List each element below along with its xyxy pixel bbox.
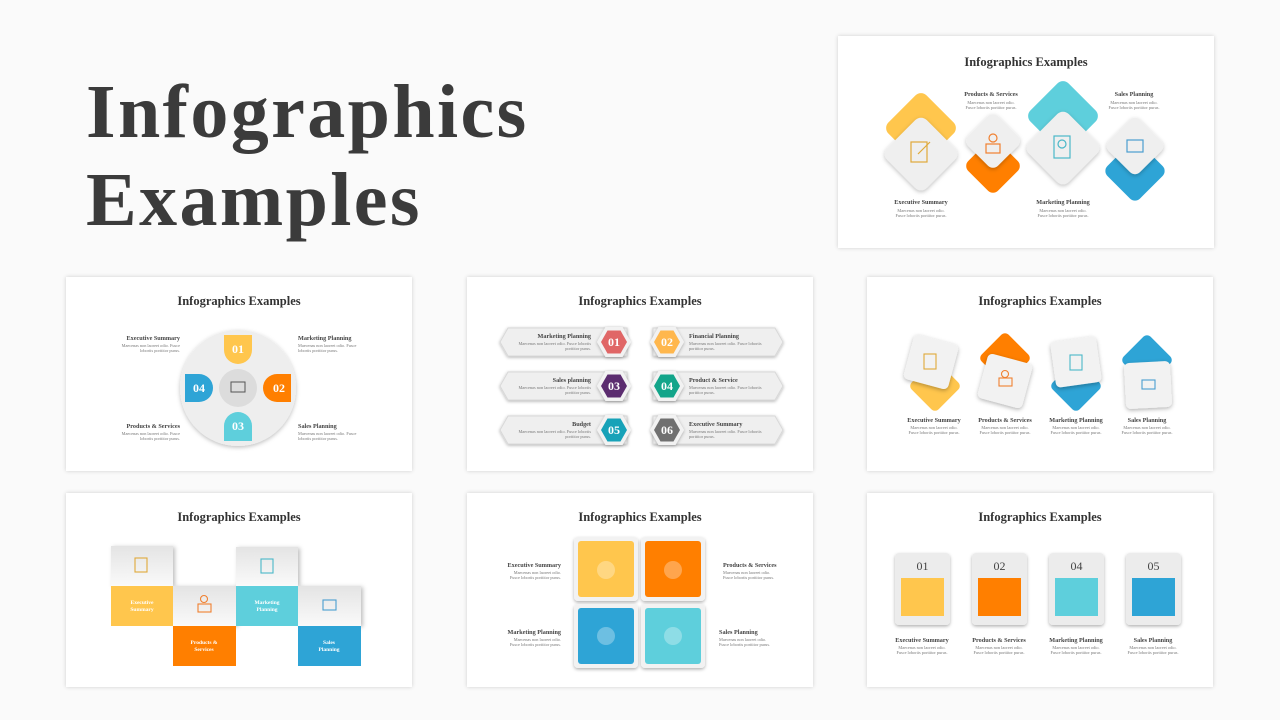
colored diamonds <box>883 78 1168 204</box>
labels: Maecenas non laoreet odio. <box>975 645 1023 650</box>
labels: Marketing Planning <box>538 333 592 340</box>
slide: hexagon list <box>467 277 813 471</box>
labels: Maecenas non laoreet odio. Fusce lobortis <box>689 429 762 434</box>
labels: porttitor purus. <box>565 390 591 395</box>
labels: Executive Summary <box>508 562 562 569</box>
slide: staircase blocks <box>66 493 412 687</box>
labels: Fusce lobortis porttitor purus. <box>908 430 960 435</box>
cards <box>895 553 1181 625</box>
block labels <box>130 600 340 653</box>
labels: Fusce lobortis porttitor purus. <box>979 430 1031 435</box>
labels: Sales Planning <box>298 423 338 430</box>
labels: lobortis porttitor purus. <box>140 348 180 353</box>
labels: lobortis porttitor purus. <box>298 436 338 441</box>
wheel: 02 <box>273 381 285 395</box>
slide: diamond chain <box>838 36 1214 248</box>
labels: Maecenas non laoreet odio. <box>1123 425 1171 430</box>
labels: Maecenas non laoreet odio. Fusce <box>122 431 180 436</box>
icons <box>911 134 1143 162</box>
labels: Marketing Planning <box>508 629 562 636</box>
colored diamonds <box>908 331 1174 413</box>
hexagons <box>597 327 684 445</box>
labels: Maecenas non laoreet odio. Fusce <box>298 431 356 436</box>
labels <box>894 91 1160 218</box>
labels: Maecenas non laoreet odio. Fusce lobortis <box>518 429 591 434</box>
white tilted squares <box>903 334 1172 409</box>
slide: 2x2 squares <box>467 493 813 687</box>
gray diamonds with icons <box>881 108 1166 194</box>
hexagons: 04 <box>661 379 673 393</box>
main title <box>86 70 529 242</box>
labels: Sales Planning <box>1134 637 1173 644</box>
labels: porttitor purus. <box>565 346 591 351</box>
hexagons: 05 <box>608 423 620 437</box>
squares <box>574 537 705 668</box>
labels: Fusce lobortis porttitor purus. <box>723 575 774 580</box>
labels: Fusce lobortis porttitor purus. <box>510 575 561 580</box>
cards: 04 <box>1070 559 1082 573</box>
hexagons: 06 <box>661 423 673 437</box>
heading: Infographics Examples <box>964 55 1088 69</box>
wheel: 04 <box>193 381 205 395</box>
labels <box>122 335 356 441</box>
heading: Infographics Examples <box>978 510 1102 524</box>
labels: Products & Services <box>964 91 1018 98</box>
labels: Maecenas non laoreet odio. Fusce <box>122 343 180 348</box>
hexagons: 02 <box>661 335 673 349</box>
labels: Fusce lobortis porttitor purus. <box>895 213 947 218</box>
labels: Maecenas non laoreet odio. <box>898 645 946 650</box>
heading: Infographics Examples <box>177 510 301 524</box>
heading: Infographics Examples <box>177 294 301 308</box>
labels: Maecenas non laoreet odio. <box>967 100 1015 105</box>
labels: Fusce lobortis porttitor purus. <box>965 105 1017 110</box>
labels: Products & Services <box>972 637 1026 644</box>
labels: Product & Service <box>689 377 738 384</box>
bars <box>500 328 783 444</box>
icons <box>924 354 1155 389</box>
block labels: Sales <box>323 640 335 646</box>
labels: Maecenas non laoreet odio. <box>910 425 958 430</box>
labels: Maecenas non laoreet odio. <box>1110 100 1158 105</box>
labels: Fusce lobortis porttitor purus. <box>719 642 770 647</box>
labels: Marketing Planning <box>1049 417 1104 424</box>
main title: Infographics <box>86 70 529 154</box>
labels: Sales Planning <box>1128 417 1167 424</box>
labels: Maecenas non laoreet odio. <box>897 208 945 213</box>
labels <box>518 333 762 439</box>
labels: Fusce lobortis porttitor purus. <box>1121 430 1173 435</box>
heading: Infographics Examples <box>578 510 702 524</box>
labels: Maecenas non laoreet odio. <box>723 570 770 575</box>
labels: Fusce lobortis porttitor purus. <box>1050 430 1102 435</box>
labels <box>895 637 1179 655</box>
block labels: Marketing <box>254 600 280 606</box>
labels: Maecenas non laoreet odio. <box>1052 425 1100 430</box>
labels: Products & Services <box>126 423 181 430</box>
labels: Sales Planning <box>1115 91 1154 98</box>
labels: Budget <box>572 421 592 428</box>
labels: Fusce lobortis porttitor purus. <box>973 650 1025 655</box>
labels: Marketing Planning <box>1049 637 1104 644</box>
wheel <box>180 330 296 446</box>
block labels: Summary <box>130 607 154 613</box>
labels: porttitor purus. <box>689 434 715 439</box>
labels: lobortis porttitor purus. <box>298 348 338 353</box>
labels: Fusce lobortis porttitor purus. <box>896 650 948 655</box>
labels: Fusce lobortis porttitor purus. <box>1050 650 1102 655</box>
labels: Executive Summary <box>689 421 743 428</box>
labels: Maecenas non laoreet odio. Fusce lobortis <box>689 385 762 390</box>
labels: Products & Services <box>723 562 777 569</box>
heading: Infographics Examples <box>578 294 702 308</box>
block labels: Planning <box>256 607 278 613</box>
labels: Executive Summary <box>127 335 181 342</box>
block labels: Planning <box>318 647 340 653</box>
labels: Fusce lobortis porttitor purus. <box>1127 650 1179 655</box>
wheel: 03 <box>232 419 244 433</box>
labels: Fusce lobortis porttitor purus. <box>1108 105 1160 110</box>
cards: 02 <box>994 559 1006 573</box>
cards: 05 <box>1148 559 1160 573</box>
labels: Maecenas non laoreet odio. <box>514 637 561 642</box>
hexagons: 01 <box>608 335 620 349</box>
labels <box>508 562 777 647</box>
labels: Executive Summary <box>907 417 962 424</box>
block labels: Products & <box>191 640 218 646</box>
labels: Maecenas non laoreet odio. <box>981 425 1029 430</box>
labels: Financial Planning <box>689 333 740 340</box>
labels: Maecenas non laoreet odio. <box>1039 208 1087 213</box>
labels: Executive Summary <box>894 199 949 206</box>
labels: Executive Summary <box>895 637 950 644</box>
cards: 01 <box>916 559 928 573</box>
labels: porttitor purus. <box>689 390 715 395</box>
labels: Maecenas non laoreet odio. Fusce lobortis <box>689 341 762 346</box>
wheel: 01 <box>232 342 244 356</box>
labels: Maecenas non laoreet odio. <box>1052 645 1100 650</box>
labels: Maecenas non laoreet odio. <box>1129 645 1177 650</box>
slide: tilted squares <box>867 277 1213 471</box>
block labels: Executive <box>131 600 154 606</box>
icons <box>135 558 336 612</box>
labels <box>907 417 1173 435</box>
labels: Sales Planning <box>719 629 759 636</box>
labels: lobortis porttitor purus. <box>140 436 180 441</box>
labels: Marketing Planning <box>298 335 352 342</box>
blocks <box>111 546 361 666</box>
labels: Fusce lobortis porttitor purus. <box>1037 213 1089 218</box>
labels: Products & Services <box>978 417 1032 424</box>
labels: Maecenas non laoreet odio. Fusce lobortis <box>518 341 591 346</box>
labels: Maecenas non laoreet odio. <box>514 570 561 575</box>
slide: numbered cards <box>867 493 1213 687</box>
labels: Marketing Planning <box>1036 199 1091 206</box>
labels: Maecenas non laoreet odio. Fusce lobortis <box>518 385 591 390</box>
labels: Fusce lobortis porttitor purus. <box>510 642 561 647</box>
labels: porttitor purus. <box>689 346 715 351</box>
labels: Maecenas non laoreet odio. Fusce <box>298 343 356 348</box>
main title: Examples <box>86 158 422 242</box>
block labels: Services <box>194 647 214 653</box>
slide: circle <box>66 277 412 471</box>
heading: Infographics Examples <box>978 294 1102 308</box>
labels: porttitor purus. <box>565 434 591 439</box>
labels: Maecenas non laoreet odio. <box>719 637 766 642</box>
labels: Sales planning <box>553 377 592 384</box>
hexagons: 03 <box>608 379 620 393</box>
